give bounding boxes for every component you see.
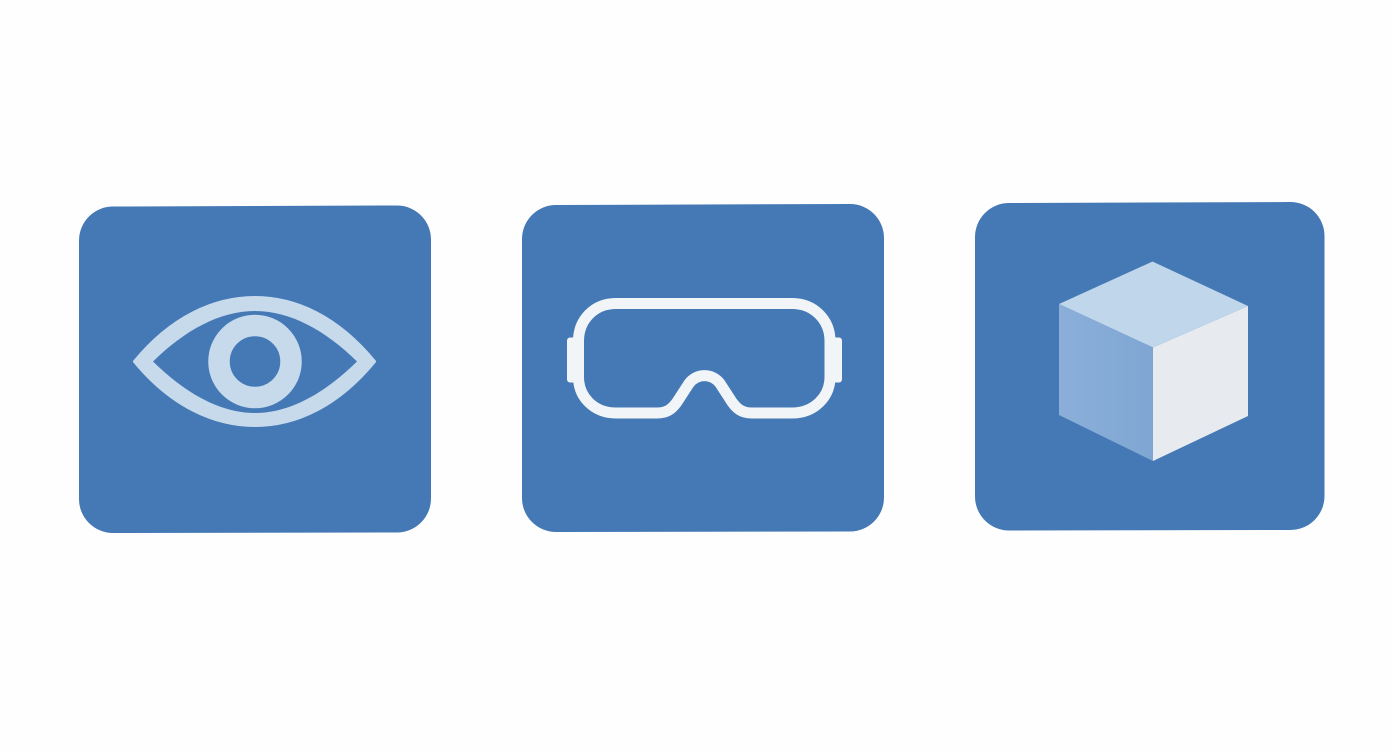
- panel: eye tile: [79, 206, 431, 533]
- panel: VR headset tile: [522, 204, 884, 532]
- panel: cube tile: [975, 202, 1324, 530]
- icon: 3D cube: [1059, 262, 1248, 461]
- icon: VR goggles: [567, 304, 842, 413]
- icon: eye: [134, 298, 374, 426]
